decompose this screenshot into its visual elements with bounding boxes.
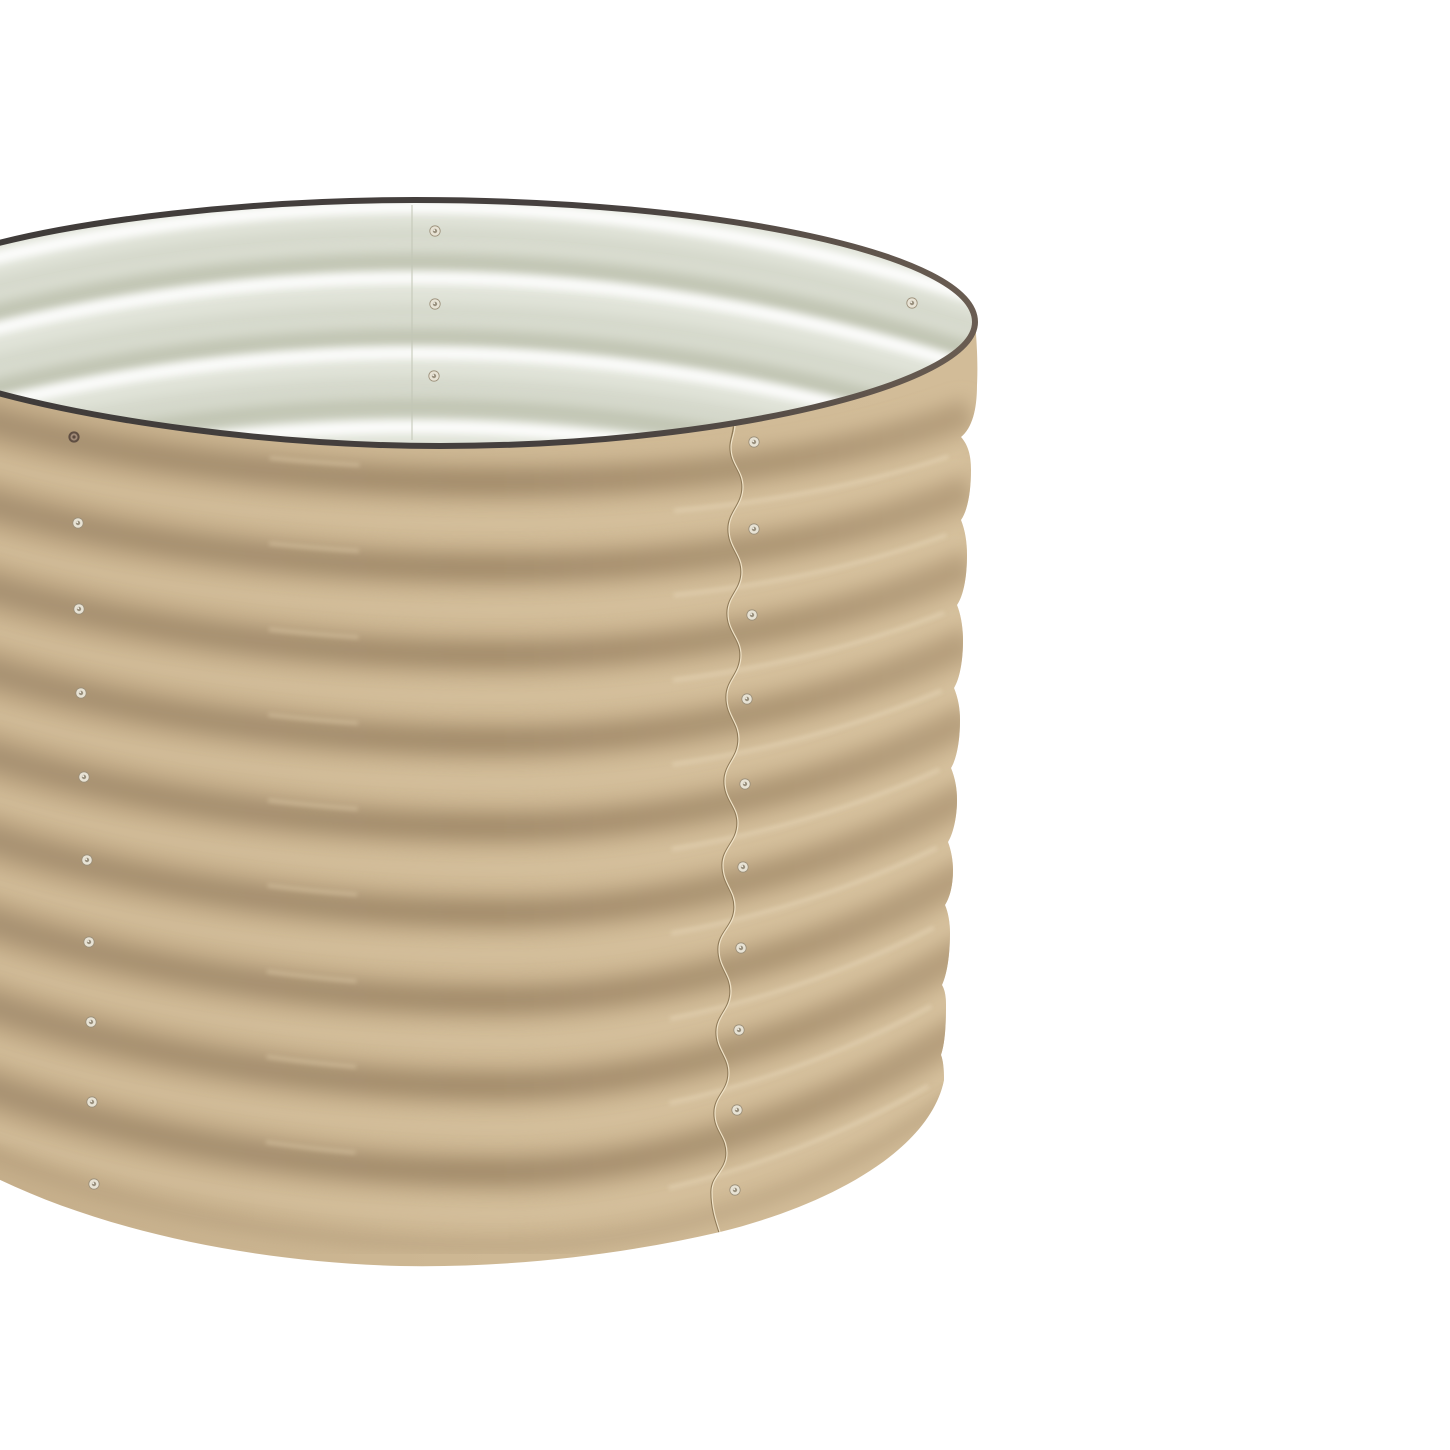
dark rolled rim <box>0 200 975 446</box>
product illustration: corrugated round planter <box>0 197 978 1266</box>
interior dark bands <box>0 247 968 434</box>
soft band near the base <box>0 1090 960 1246</box>
interior white highlights <box>0 203 964 440</box>
light bands along each rib <box>0 455 970 1214</box>
wavy panel seam <box>711 426 743 1232</box>
sharp highlight lines on the right-hand ribs <box>670 456 946 1189</box>
dark corrugation grooves <box>0 413 970 1172</box>
interior rivets <box>428 225 918 382</box>
left column of rivets <box>68 431 100 1190</box>
interior seam line <box>412 205 413 440</box>
planter interior: pale corrugated inside wall <box>0 203 972 443</box>
interior mid-tone bands <box>0 228 972 420</box>
short soft streaks in the centre of the ribs <box>266 456 358 1155</box>
planter body: corrugated beige wall <box>0 320 977 1266</box>
right column of rivets beside the seam <box>729 436 760 1196</box>
